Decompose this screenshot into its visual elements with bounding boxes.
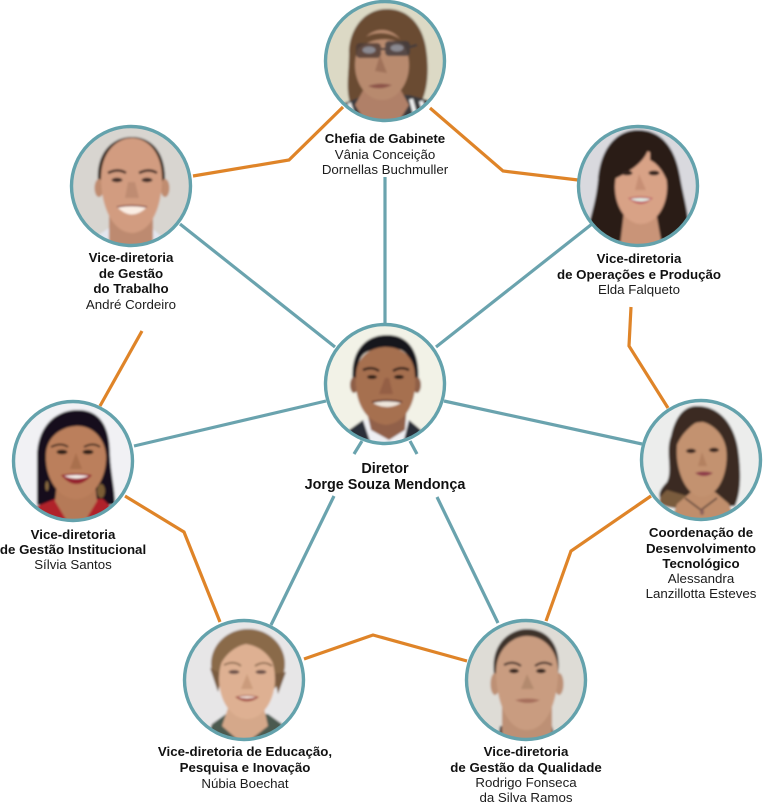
label: Coordenação de Desenvolvimento Tecnológico: Alessandra [668, 571, 735, 586]
portrait: Jorge [325, 324, 445, 444]
portrait: Elda [578, 126, 698, 246]
node: Diretor [305, 324, 466, 493]
node: Vice-diretoria de Gestão Institucional [0, 401, 146, 572]
label: Diretor: Diretor [361, 461, 409, 477]
node: Vice-diretoria de Educação, Pesquisa e Inovação [158, 620, 332, 791]
node: Vice-diretoria de Gestão do Trabalho [71, 126, 191, 312]
label: Gestão do Trabalho: do Trabalho [93, 281, 169, 296]
portrait: André [71, 126, 191, 246]
label: Operações e Produção: de Operações e Produção [557, 267, 721, 282]
label: Gestão do Trabalho: de Gestão [99, 266, 163, 281]
orange connectors between vice-directorates [100, 107, 668, 661]
label: Gestão do Trabalho: Vice-diretoria [89, 250, 174, 265]
teal connectors from the director [134, 177, 642, 625]
label: Gestão Institucional: Sílvia Santos [34, 557, 112, 572]
label: Gestão Institucional [0, 527, 146, 572]
label: Gestão Institucional: de Gestão Institucional [0, 542, 146, 557]
label: Gestão da Qualidade: Vice-diretoria [484, 744, 569, 759]
label: Coordenação de Desenvolvimento Tecnológico: Coordenação de [649, 525, 753, 540]
label: Diretor: Jorge Souza Mendonça [305, 477, 466, 493]
label: Gestão da Qualidade [450, 744, 602, 803]
label: Gestão da Qualidade: de Gestão da Qualidade [450, 760, 602, 775]
label: Coordenação de Desenvolvimento Tecnológico: Desenvolvimento [646, 541, 756, 556]
portrait: Núbia [184, 620, 304, 740]
label: Gestão do Trabalho: André Cordeiro [86, 297, 176, 312]
label: Gestão Institucional: Vice-diretoria [31, 527, 116, 542]
label: Educação, Pesquisa e Inovação: Pesquisa e Inovação [180, 760, 310, 775]
node: Chefia de Gabinete [322, 1, 449, 177]
label: Operações e Produção: Vice-diretoria [597, 251, 682, 266]
portrait: Sílvia [13, 401, 133, 521]
label: Educação, Pesquisa e Inovação: Núbia Boechat [201, 776, 289, 791]
label: Educação, Pesquisa e Inovação [158, 744, 332, 791]
label: Coordenação de Desenvolvimento Tecnológico: Lanzillotta Esteves [646, 586, 757, 601]
node: Vice-diretoria de Gestão da Qualidade [450, 620, 602, 803]
portrait: Rodrigo [466, 620, 586, 742]
label: Chefia de Gabinete: Vânia Conceição [335, 147, 435, 162]
label: Operações e Produção: Elda Falqueto [598, 282, 680, 297]
label: Diretor [305, 461, 466, 493]
label: Operações e Produção [557, 251, 721, 297]
node: Vice-diretoria de Operações e Produção [557, 126, 721, 297]
label: Coordenação de Desenvolvimento Tecnológico: Tecnológico [662, 556, 740, 571]
label: Educação, Pesquisa e Inovação: Vice-diretoria de Educação, [158, 744, 332, 759]
label: Chefia de Gabinete: Dornellas Buchmuller [322, 162, 449, 177]
label: Chefia de Gabinete [322, 131, 449, 177]
node: Coordenação de Desenvolvimento Tecnológico [641, 400, 761, 601]
label: Gestão da Qualidade: Rodrigo Fonseca [475, 775, 577, 790]
portrait: Alessandra [641, 400, 761, 520]
portrait: Vânia [325, 1, 445, 121]
label: Gestão do Trabalho [86, 250, 176, 312]
label: Coordenação de Desenvolvimento Tecnológico [646, 525, 757, 601]
label: Chefia de Gabinete: Chefia de Gabinete [325, 131, 445, 146]
